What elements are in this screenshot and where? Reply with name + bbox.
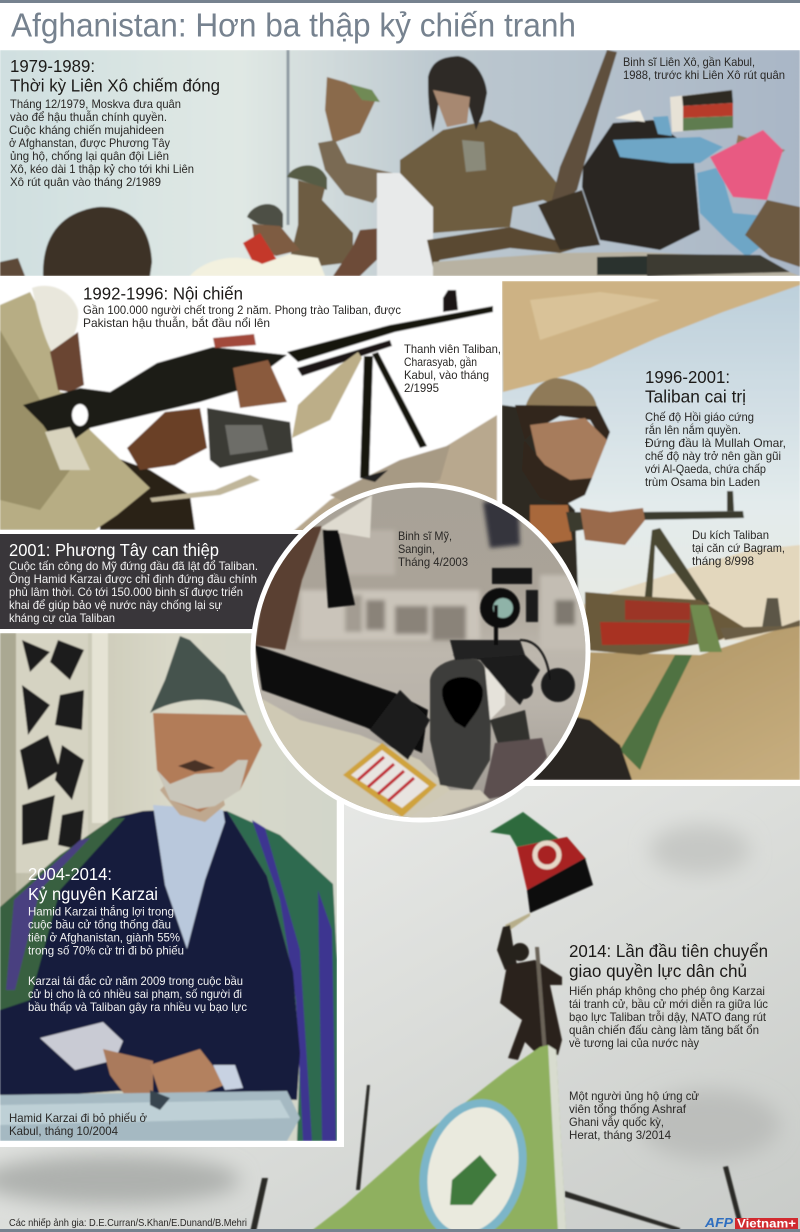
heading: Thời kỳ Liên Xô chiếm đóng <box>10 76 220 96</box>
text block: bầu thấp và Taliban gây ra nhiều vụ bạo lực <box>28 1000 247 1014</box>
heading: 1996-2001: <box>645 367 730 387</box>
text block: quân chiến đấu càng làm tăng bất ổn <box>569 1023 759 1037</box>
text block: Tháng 12/1979, Moskva đưa quân <box>10 97 181 111</box>
Vietnam+ wordmark: Vietnam+ <box>737 1218 796 1230</box>
caption <box>569 1089 699 1142</box>
caption <box>623 55 785 82</box>
footer bar <box>0 1229 800 1232</box>
white circle frame <box>250 482 590 822</box>
text block: Pakistan hậu thuẫn, bắt đầu nổi lên <box>83 316 270 330</box>
text block <box>569 984 768 1050</box>
caption: Binh sĩ Liên Xô, gần Kabul, <box>623 55 755 69</box>
panel: first democratic transfer 2014 <box>0 786 800 1232</box>
text block: tiên ở Afghanistan, giành 55% <box>28 930 180 944</box>
text block: trùm Osama bin Laden <box>645 475 760 489</box>
text block: Đứng đầu là Mullah Omar, <box>645 436 786 450</box>
text block: Chế độ Hồi giáo cứng <box>645 410 754 424</box>
dark box <box>0 534 300 629</box>
text block: vào để hậu thuẫn chính quyền. <box>10 110 167 124</box>
text block <box>9 97 194 189</box>
caption <box>404 342 501 395</box>
text block: Xô rút quân vào tháng 2/1989 <box>10 175 161 189</box>
text block: phủ lâm thời. Có tới 150.000 binh sĩ được triển <box>9 585 243 599</box>
text block: tái tranh cử, bầu cử mới diễn ra giữa lúc <box>569 997 768 1011</box>
Vietnam+ badge <box>735 1218 798 1229</box>
panel: Western intervention 2001 <box>0 534 300 629</box>
caption: Du kích Taliban <box>692 528 769 542</box>
text block: với Al-Qaeda, chứa chấp <box>645 462 766 476</box>
caption: Hamid Karzai đi bỏ phiếu ở <box>9 1111 147 1125</box>
photo credits: Các nhiếp ảnh gia: D.E.Curran/S.Khan/E.Dunand/B.Mehri <box>9 1217 247 1229</box>
heading: 2004-2014: <box>28 864 112 884</box>
logo: AFP Vietnam+ <box>704 1216 798 1230</box>
text block <box>9 559 258 625</box>
heading: 2001: Phương Tây can thiệp <box>9 540 219 560</box>
caption: Kabul, vào tháng <box>404 368 489 382</box>
caption: Kabul, tháng 10/2004 <box>9 1124 118 1138</box>
panel: Soviet occupation 1979-1989 <box>0 50 800 276</box>
text block: Cuộc kháng chiến mujahideen <box>9 123 164 137</box>
text block: rắn lên nắm quyền. <box>645 423 741 437</box>
AFP wordmark: AFP <box>704 1216 734 1230</box>
caption: Ghani vẫy quốc kỳ, <box>569 1115 664 1129</box>
heading <box>10 56 220 96</box>
caption: Một người ủng hộ ứng cử <box>569 1089 699 1103</box>
photo: Hamid Karzai voting <box>0 633 337 1141</box>
text block: bạo lực Taliban trỗi dậy, NATO đang rút <box>569 1010 767 1024</box>
heading: 1979-1989: <box>10 56 95 76</box>
photo: fighter with machine gun <box>0 278 498 534</box>
caption: Binh sĩ Mỹ, <box>398 529 452 543</box>
caption: Charasyab, gần <box>404 355 477 369</box>
heading <box>569 941 768 981</box>
heading: giao quyền lực dân chủ <box>569 961 747 981</box>
text block: Xô, kéo dài 1 thập kỷ cho tới khi Liên <box>10 162 194 176</box>
photo: supporter waving flag on banner <box>0 786 800 1232</box>
caption <box>692 528 785 568</box>
photo: Taliban fighter with machine gun <box>502 281 800 780</box>
title: Afghanistan: Hơn ba thập kỷ chiến tranh <box>11 6 576 44</box>
text block: trong số 70% cử tri đi bỏ phiếu <box>28 944 184 958</box>
caption: Tháng 4/2003 <box>398 555 468 569</box>
text block: ở Afghanstan, được Phương Tây <box>9 136 170 150</box>
heading: 1992-1996: Nội chiến <box>83 284 243 304</box>
text block <box>645 410 786 489</box>
caption: tại căn cứ Bagram, <box>692 541 785 555</box>
text block: chế độ này trở nên gần gũi <box>645 449 781 463</box>
text block: cuộc bầu cử tổng thống đầu <box>28 918 171 932</box>
text block: Ông Hamid Karzai được chỉ định đứng đầu chính <box>9 572 257 586</box>
text block: kháng cự của Taliban <box>9 611 115 625</box>
caption <box>398 529 468 569</box>
text block: Karzai tái đắc cử năm 2009 trong cuộc bầu <box>28 974 243 988</box>
text block: Gần 100.000 người chết trong 2 năm. Phong trào Taliban, được <box>83 303 401 317</box>
text block: về tương lai của nước này <box>569 1036 699 1050</box>
panel: civil war 1992-1996 <box>0 278 501 534</box>
text block <box>28 904 184 958</box>
caption <box>9 1111 147 1138</box>
header bar <box>0 0 800 3</box>
heading: 2014: Lần đầu tiên chuyển <box>569 941 768 961</box>
text block <box>83 303 401 330</box>
panel: Taliban rule 1996-2001 <box>502 281 800 780</box>
heading <box>28 864 158 904</box>
text block: Hiến pháp không cho phép ông Karzai <box>569 984 765 998</box>
text block <box>28 974 247 1014</box>
caption: Sangin, <box>398 542 435 556</box>
heading: Taliban cai trị <box>645 386 746 406</box>
panel: Karzai era 2004-2014 <box>0 633 337 1141</box>
text block: ủng hộ, chống lại quân đội Liên <box>10 149 169 163</box>
caption: 1988, trước khi Liên Xô rút quân <box>623 68 785 82</box>
caption: Thanh viên Taliban, <box>404 342 501 356</box>
photo: Soviet soldier on tank <box>0 50 800 276</box>
photo: soldier with rifle sight <box>250 482 592 824</box>
text block: khai để giúp bảo vệ nước này chống lại sự <box>9 598 222 612</box>
caption: viên tổng thống Ashraf <box>569 1102 687 1116</box>
caption: 2/1995 <box>404 381 439 395</box>
text block: Cuộc tấn công do Mỹ đứng đầu đã lật đổ Taliban. <box>9 559 258 573</box>
caption: tháng 8/998 <box>692 554 754 568</box>
panel: US soldier circle photo <box>250 482 592 824</box>
text block: Hamid Karzai thắng lợi trong <box>28 904 174 918</box>
heading: Kỷ nguyên Karzai <box>28 884 158 904</box>
text block: cử bị cho là có nhiều sai phạm, số người đi <box>28 987 242 1001</box>
caption: Herat, tháng 3/2014 <box>569 1128 671 1142</box>
heading <box>645 367 746 406</box>
